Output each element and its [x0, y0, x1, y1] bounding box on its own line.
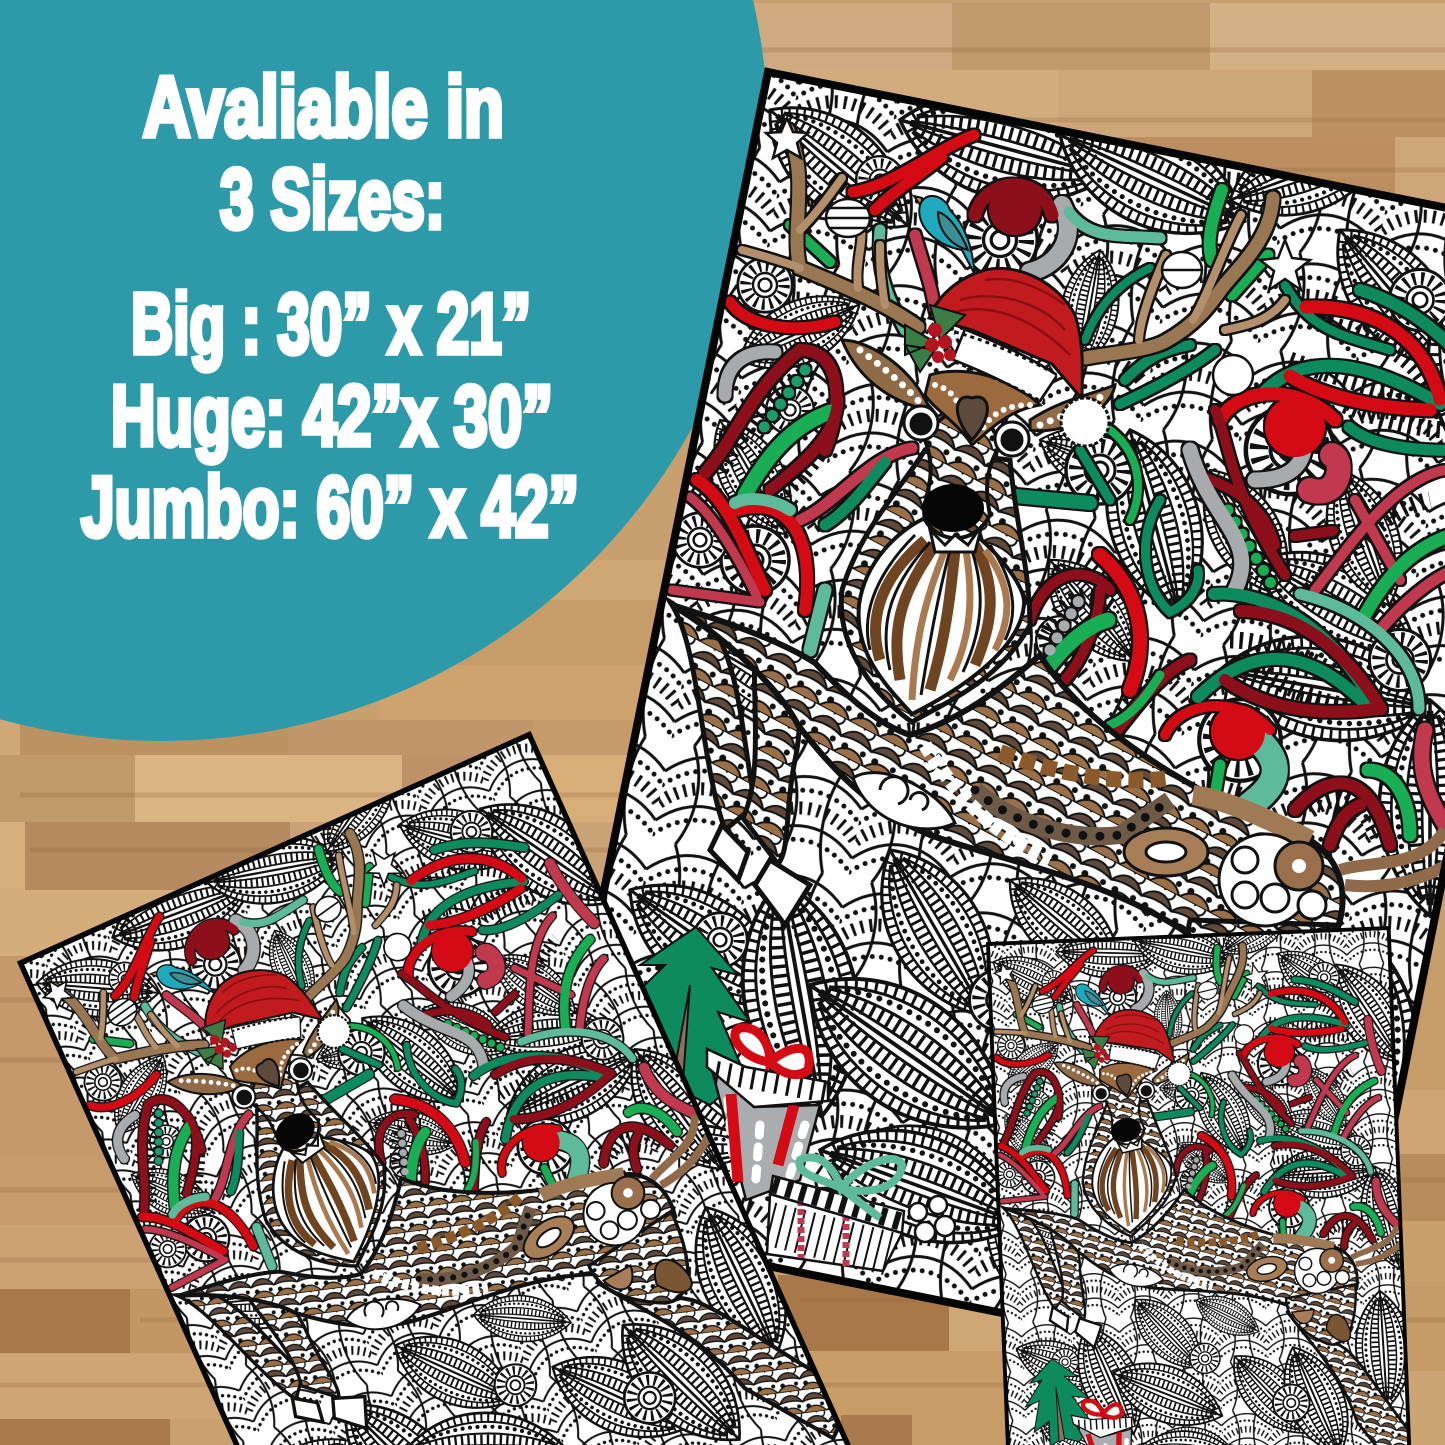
hatching under ornaments — [720, 320, 1445, 840]
reindeer rump — [1188, 920, 1335, 1034]
poster: big, small upright reindeer poster — [879, 850, 1445, 1445]
teal circle panel — [0, 0, 768, 741]
size list: Big : 30” x 21” — [131, 277, 531, 372]
reindeer body — [672, 605, 1343, 935]
coloured ornaments — [672, 135, 1445, 845]
mint gift box — [767, 1157, 904, 1271]
reindeer face — [924, 411, 1000, 538]
reindeer ears — [842, 340, 1115, 431]
heading: available in 3 sizes — [143, 60, 504, 247]
size list: Huge: 42”x 30” — [111, 369, 553, 464]
size list — [81, 277, 579, 555]
santa hat pompom — [1061, 398, 1109, 446]
reindeer front leg right — [743, 640, 799, 864]
holly berries — [909, 1196, 955, 1242]
poster border — [538, 72, 1445, 1381]
body details — [853, 745, 1326, 1034]
reindeer neck — [841, 450, 1030, 722]
heading: available in 3 sizes: Avaliable in — [143, 60, 504, 155]
holly sprig — [905, 305, 965, 372]
poster: huge, rotated reindeer poster — [0, 640, 990, 1445]
leaf pattern background — [593, 71, 1445, 1327]
reindeer hind leg — [1185, 945, 1400, 1335]
bluebird — [914, 196, 975, 275]
size list: Jumbo: 60” x 42” — [81, 460, 579, 555]
reindeer eyes — [904, 406, 1029, 456]
reindeer nose — [922, 484, 984, 532]
heading: available in 3 sizes: 3 Sizes: — [220, 152, 445, 247]
reindeer tail — [1340, 830, 1445, 886]
red gift box — [707, 1028, 828, 1200]
reindeer front leg left — [672, 605, 755, 830]
ornaments and stars — [766, 118, 1310, 395]
poster: jumbo, largest reindeer poster — [538, 71, 1445, 1381]
reindeer beard stripes — [859, 519, 1024, 714]
reindeer hooves — [710, 825, 810, 925]
reindeer mouth — [930, 525, 982, 552]
santa hat — [929, 268, 1082, 404]
reindeer forehead heart — [925, 371, 1040, 445]
tree — [620, 927, 750, 1105]
reindeer antlers — [742, 130, 1285, 358]
